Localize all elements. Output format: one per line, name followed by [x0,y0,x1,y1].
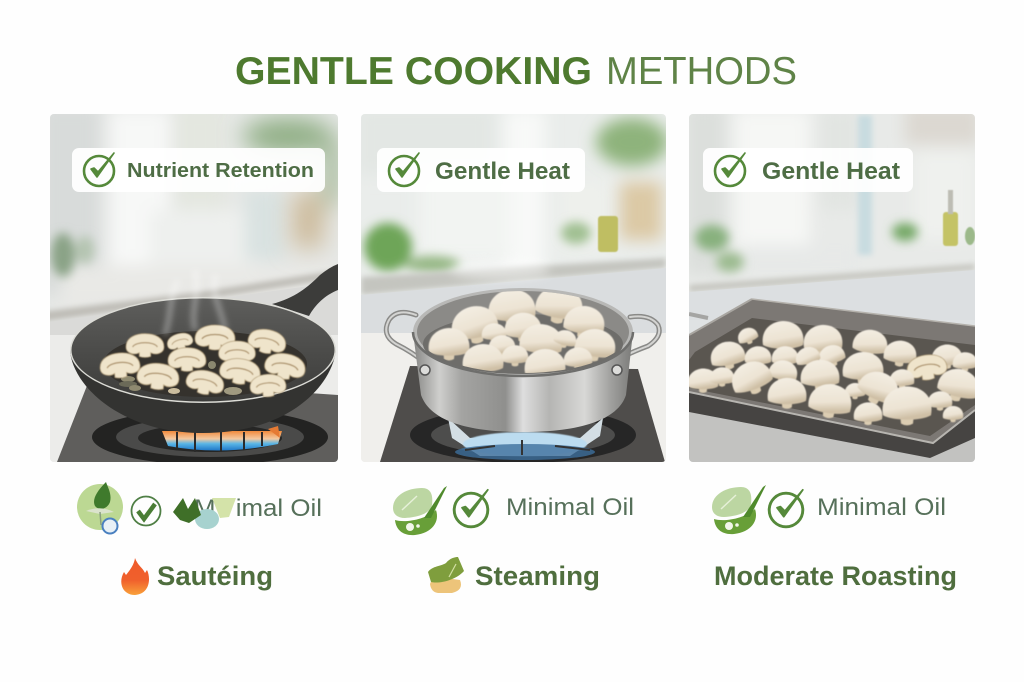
icon: leaf and pan [393,486,447,535]
feature text: Minimal Oil [817,494,946,521]
steam [160,288,230,338]
icon: check [769,490,803,527]
stove top [57,386,338,462]
gas burner [92,415,328,462]
icon: leaf badge [77,482,123,534]
stove top [380,366,665,462]
label: gentle heat [377,148,585,192]
title: GENTLE COOKING [235,50,592,93]
method: moderate roasting: Moderate Roasting [714,561,957,591]
whole mushrooms on tray [688,321,982,425]
label: gentle heat: Gentle Heat [762,158,900,185]
label: gentle heat: Gentle Heat [435,158,570,185]
counter top [689,412,975,462]
steel pot [413,288,633,376]
flame [162,426,282,452]
panel: roasting photo [685,105,982,462]
panel: sauteing photo [50,114,338,462]
label: gentle heat [703,148,913,192]
pot body [413,332,633,432]
icon: leaf and pan [712,485,766,534]
icon: overlapping leaf fragments [173,496,236,529]
pot handles [386,312,659,362]
whole mushrooms in pot [428,291,616,373]
title: METHODS [606,50,797,93]
feature text: Minimal Oil [506,494,634,521]
icon: check [132,496,160,526]
icon: leaf and bowl [428,557,464,593]
feature row: roasting minimal oil [712,485,946,534]
baking tray [689,299,975,458]
panel: steaming photo [355,105,668,463]
feature row: steaming minimal oil [393,486,634,535]
method: steaming [428,557,600,593]
label: nutrient retention: Nutrient Retention [127,159,314,182]
heading: Sautéing [157,561,273,591]
feature text: Minimal Oil [194,495,322,522]
method: sauteing [121,558,273,595]
steam [450,260,550,280]
sliced mushrooms [99,325,307,398]
frying pan [70,264,338,433]
icon: check [454,490,488,527]
heading: Steaming [475,561,600,591]
icon: flame [121,558,149,595]
gas burner [410,416,636,462]
label: nutrient retention [72,148,325,192]
title [235,50,797,93]
feature row: sauteing minimal oil [77,482,322,534]
